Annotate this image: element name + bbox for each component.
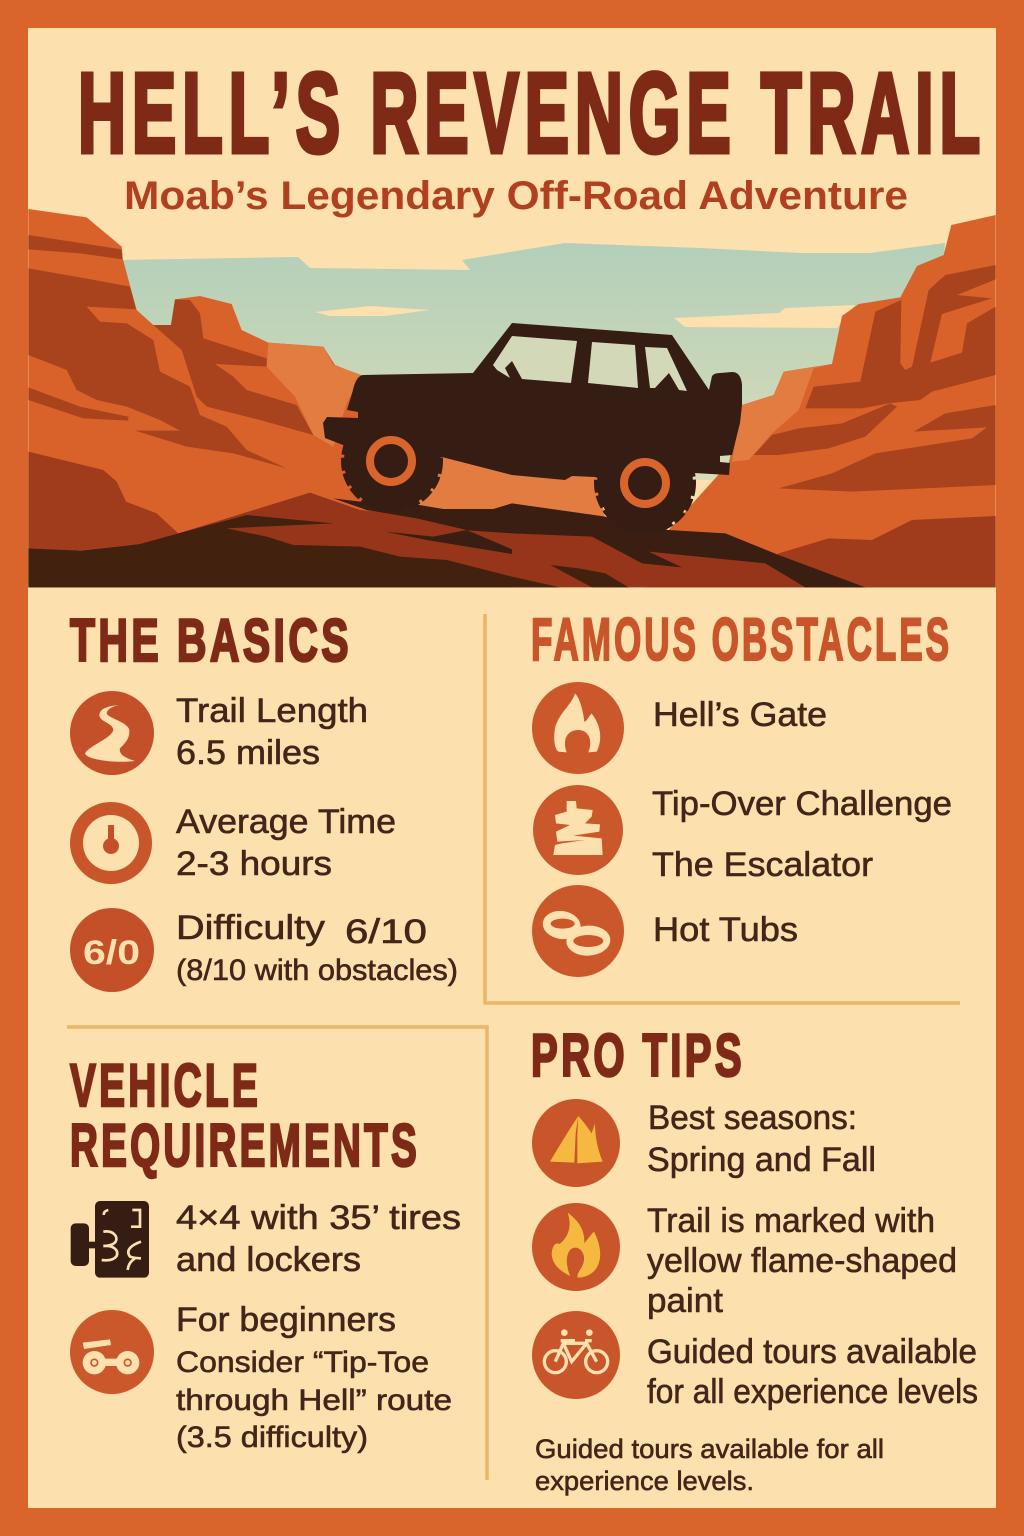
obstacle list: Hell’s Gate	[653, 696, 827, 734]
text: trail markings: Trail is marked with	[647, 1202, 935, 1240]
icon: stacked rocks	[533, 785, 623, 875]
text: beginners route	[176, 1301, 452, 1454]
section dividers	[67, 614, 960, 1480]
text: trail length: Trail Length	[176, 692, 368, 730]
text: average time: 2-3 hours	[176, 845, 332, 883]
text: best seasons	[647, 1099, 876, 1179]
jeep silhouette	[323, 323, 742, 532]
text: tire requirement: 4×4 with 35’ tires	[176, 1199, 461, 1237]
icon: yellow flame	[532, 1203, 620, 1291]
text: trail markings	[647, 1202, 957, 1320]
text: difficulty: 6/10	[345, 913, 427, 951]
icon: difficulty badge: 6/0	[83, 934, 140, 972]
text: tire requirement: and lockers	[176, 1241, 361, 1279]
text: average time	[176, 803, 396, 883]
sky	[123, 243, 945, 480]
icon: gauge clock	[70, 802, 152, 884]
text: trail length: 6.5 miles	[176, 734, 320, 772]
icon: difficulty badge	[70, 908, 154, 992]
clouds	[296, 255, 855, 328]
footer note: experience levels.	[535, 1466, 754, 1496]
right canyon wall	[645, 215, 996, 587]
text: beginners route: Consider “Tip-Toe	[176, 1346, 429, 1379]
heading: vehicle requirements: VEHICLE	[70, 1052, 261, 1119]
illustration: canyon scene with jeep	[28, 209, 996, 587]
text: trail markings: paint	[647, 1282, 724, 1320]
text: difficulty: (8/10 with obstacles)	[176, 954, 458, 987]
heading: vehicle requirements: REQUIREMENTS	[70, 1112, 420, 1179]
icon: tent	[532, 1099, 620, 1187]
obstacle list: Tip-Over Challenge	[652, 785, 952, 823]
foreground slickrock	[28, 455, 865, 587]
text: beginners route: For beginners	[176, 1301, 396, 1339]
text: trail markings: yellow flame-shaped	[647, 1242, 957, 1280]
heading: vehicle requirements	[70, 1052, 420, 1179]
text: beginners route: through Hell” route	[176, 1384, 452, 1417]
obstacle list: The Escalator	[652, 846, 873, 884]
footer note: Guided tours available for all	[535, 1434, 884, 1464]
subtitle: Moab’s Legendary Off-Road Adventure	[124, 174, 908, 218]
text: average time: Average Time	[176, 803, 396, 841]
heading: pro tips: PRO TIPS	[531, 1022, 745, 1089]
icon: drivetrain	[71, 1201, 149, 1278]
text: guided tours: Guided tours available	[647, 1333, 977, 1371]
text: guided tours	[647, 1333, 978, 1411]
text: guided tours: for all experience levels	[647, 1373, 978, 1411]
text: best seasons: Best seasons:	[648, 1099, 857, 1137]
icon: winding trail	[70, 691, 154, 775]
icon: flame gate	[532, 682, 624, 774]
footer note	[535, 1434, 884, 1496]
icon: hot tub rings	[532, 885, 624, 977]
text: beginners route: (3.5 difficulty)	[176, 1421, 368, 1454]
obstacle list	[652, 696, 952, 949]
panel: pro tips	[531, 1022, 978, 1496]
text: tire requirement	[176, 1199, 461, 1279]
panel: famous obstacles	[531, 606, 952, 977]
icon: bicycle	[532, 1311, 620, 1399]
panel: vehicle requirements	[70, 1052, 461, 1454]
panel: the basics	[70, 607, 458, 992]
left canyon wall	[28, 209, 512, 587]
text: difficulty	[176, 909, 458, 987]
text: best seasons: Spring and Fall	[647, 1141, 876, 1179]
heading: the basics: THE BASICS	[70, 607, 352, 674]
icon: off-road vehicle	[70, 1310, 154, 1394]
text: difficulty: Difficulty	[176, 909, 325, 947]
text: trail length	[176, 692, 368, 772]
obstacle list: Hot Tubs	[653, 911, 798, 949]
